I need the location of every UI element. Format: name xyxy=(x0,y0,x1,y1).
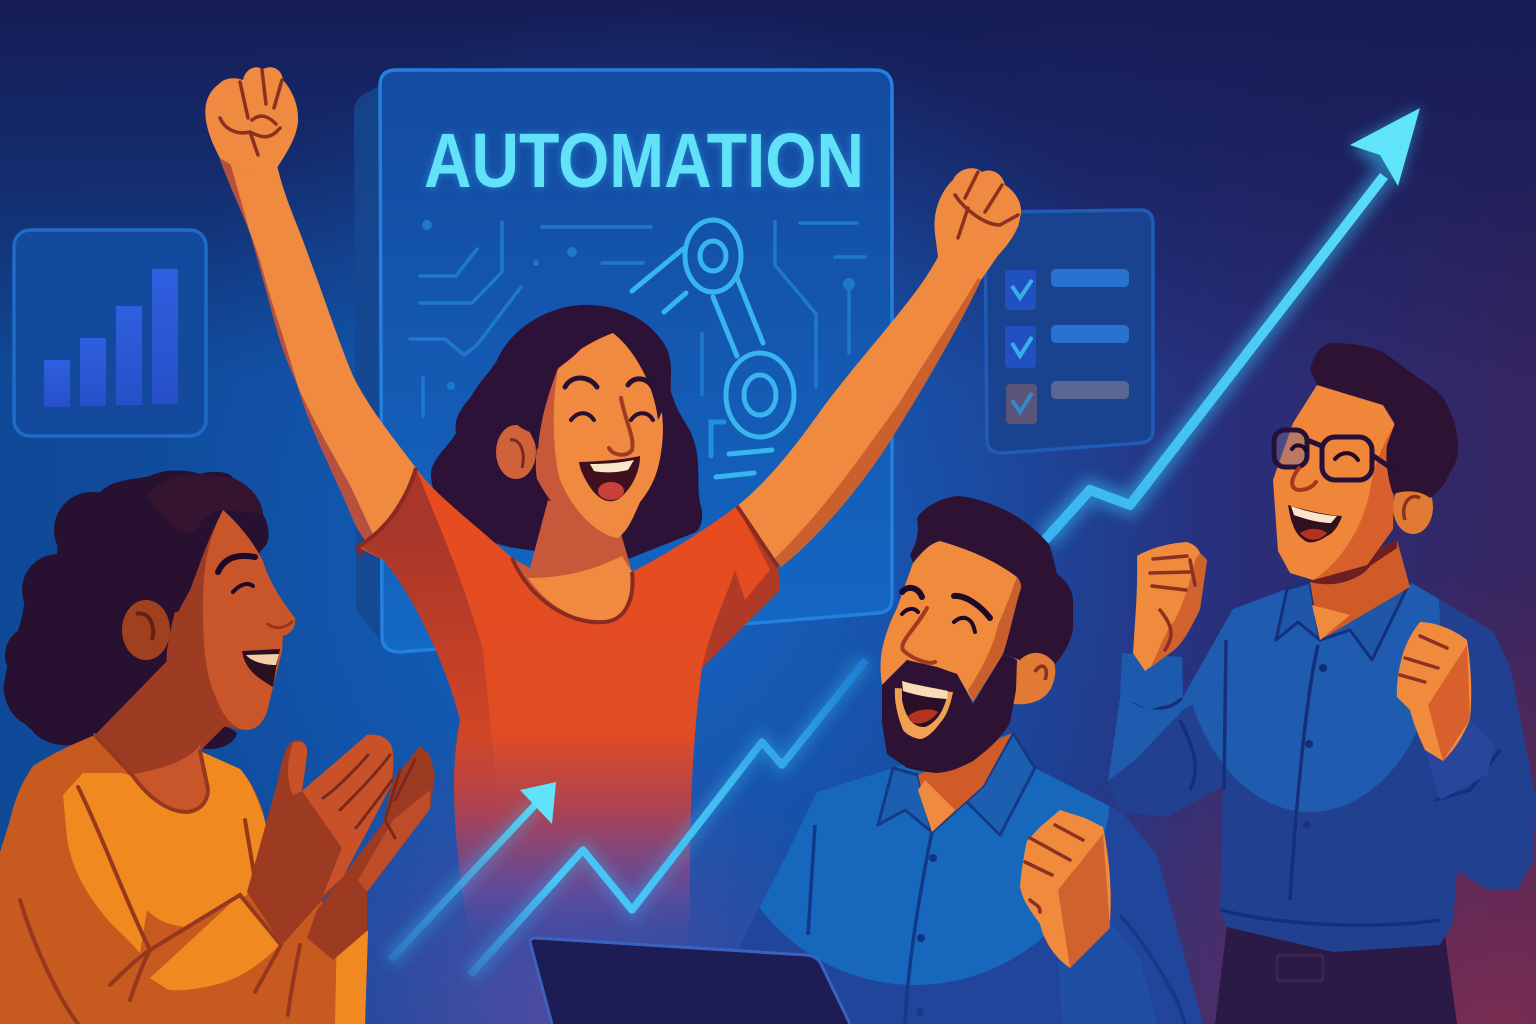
person: central woman, arms raised xyxy=(205,67,1021,950)
face details xyxy=(1292,445,1358,490)
arm shadow right xyxy=(775,278,981,567)
face xyxy=(167,510,295,730)
ear xyxy=(122,600,170,660)
checklist row 1 xyxy=(1005,269,1129,310)
icon: glasses xyxy=(1274,430,1394,480)
neck xyxy=(95,661,225,812)
bar chart bars xyxy=(44,269,178,407)
shirt xyxy=(740,733,1203,1024)
sweater xyxy=(0,735,368,1024)
collar xyxy=(878,733,1035,835)
icon: left fist xyxy=(205,67,298,176)
laughing mouth xyxy=(1288,505,1342,542)
clapping hands xyxy=(247,735,435,960)
neck xyxy=(918,733,1012,832)
open mouth xyxy=(242,649,280,687)
panel: bar chart xyxy=(14,230,206,436)
raised fist left xyxy=(1120,542,1207,710)
panel: checklist xyxy=(985,210,1153,453)
neck xyxy=(512,500,633,622)
laptop xyxy=(530,938,850,1024)
trousers xyxy=(1215,927,1457,1024)
shirt lit area xyxy=(760,734,1110,985)
raised arm left xyxy=(217,150,416,550)
arrow: middle rising trend xyxy=(470,660,866,975)
sweater folds xyxy=(20,735,300,1024)
beard xyxy=(882,654,1017,773)
arrow: small rising trend xyxy=(390,782,556,960)
ear xyxy=(1012,650,1055,704)
heading: AUTOMATION: AUTOMATION xyxy=(424,118,864,204)
person: woman on left clapping xyxy=(0,470,435,1024)
person: man with glasses xyxy=(1108,343,1536,1024)
hair back xyxy=(431,305,702,563)
icon: robot arm xyxy=(632,220,794,477)
circuit traces xyxy=(410,220,865,416)
person: bearded man xyxy=(720,496,1203,1024)
shirt xyxy=(358,468,780,950)
face details xyxy=(218,556,292,628)
shirt xyxy=(1108,582,1536,952)
ear xyxy=(496,425,536,479)
hair xyxy=(910,496,1073,664)
shirt shadow band xyxy=(360,468,500,820)
forearm sleeve xyxy=(150,895,280,990)
laughing mouth xyxy=(579,456,640,501)
checklist row 3 xyxy=(1006,381,1129,424)
hair xyxy=(1310,343,1458,498)
panel: automation board xyxy=(354,70,892,652)
head xyxy=(1273,385,1395,580)
raised arm right xyxy=(737,225,1019,567)
face details xyxy=(902,588,990,663)
hair over forehead xyxy=(167,510,223,612)
heading: AUTOMATION: AUTOMATION xyxy=(424,118,864,204)
neck xyxy=(1310,540,1410,640)
face details xyxy=(565,378,653,455)
raised fist with sleeve xyxy=(1020,810,1157,1024)
arrow: large rising trend xyxy=(1045,108,1420,540)
head xyxy=(536,333,663,539)
sweater lit area xyxy=(63,751,273,953)
checklist row 2 xyxy=(1005,325,1129,368)
shirt lit area xyxy=(1108,582,1440,812)
ear xyxy=(1393,480,1433,534)
mouth xyxy=(895,681,953,739)
raised fist right xyxy=(1397,622,1495,800)
arm shadow left xyxy=(217,150,378,550)
icon: right fist xyxy=(934,168,1021,268)
curly hair xyxy=(4,470,269,749)
collar xyxy=(1276,560,1410,660)
hair front xyxy=(511,308,593,450)
head xyxy=(880,541,1021,702)
